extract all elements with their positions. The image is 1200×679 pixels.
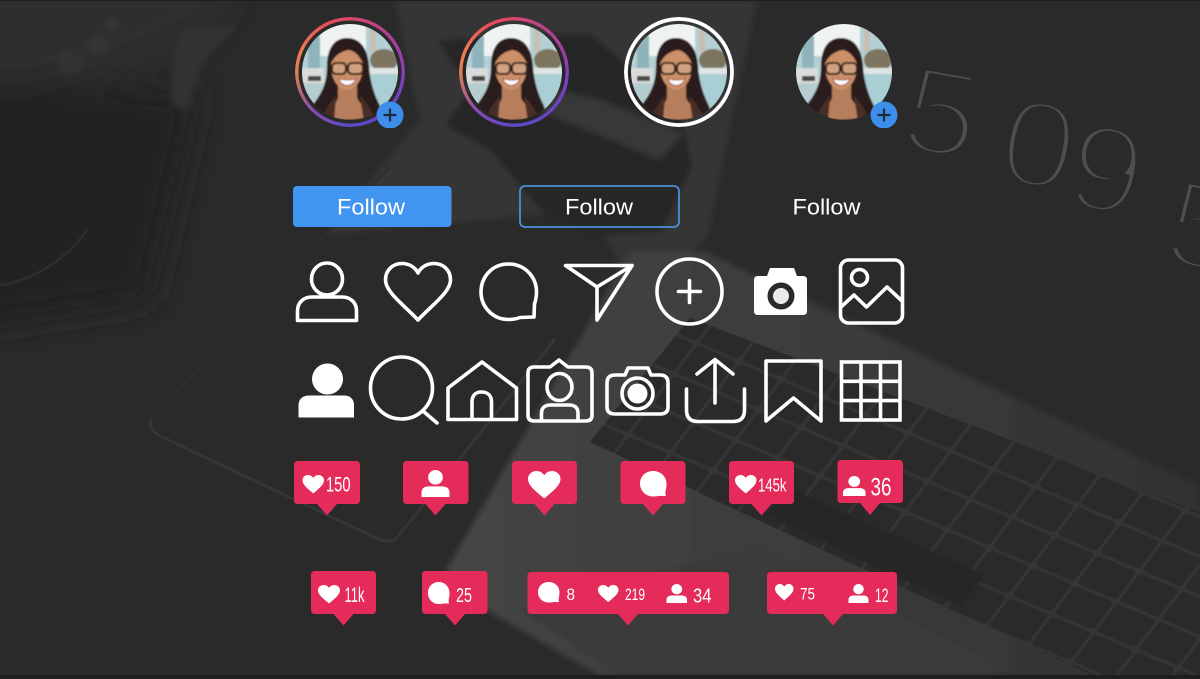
icon: house [448,362,516,420]
background clock digits [892,37,1200,301]
button: filled Follow [293,186,452,227]
icon: person outline [298,263,356,320]
badge: combined 8, 219, 34: 34 [693,586,712,608]
button: outlined Follow: Follow [565,194,634,220]
badge: likes 150 [294,461,360,516]
icon: bookmark [766,361,821,421]
badge: combined 8, 219, 34 [528,572,729,626]
badge: heart [512,461,577,516]
badge: likes 145k: 145k [758,476,787,496]
badge: comments 25 [422,571,488,626]
avatar 3: white ring [624,17,734,127]
badge: follower [403,461,468,516]
badge: likes 11k: 11k [344,584,365,607]
icon: grid [842,362,900,420]
badge: followers 36: 36 [870,474,892,502]
icon: heart outline [386,264,450,320]
icon: portrait frame [528,360,592,421]
icon: share upload [686,360,744,422]
button: text Follow: Follow [792,194,861,220]
avatar 4: no ring with plus badge [796,24,898,128]
icon: camera outline [607,368,668,414]
badge: combined 75, 12: 75 [800,584,815,604]
badge: combined 75, 12: 12 [875,586,888,607]
badge: comments 25: 25 [456,585,472,607]
button: filled Follow: Follow [337,194,406,220]
badge: likes 11k [311,571,376,626]
avatar 1: gradient ring with plus badge [295,17,405,128]
badge: followers 36 [838,460,903,515]
icon: comment bubble outline [481,264,536,320]
icon: magnifier [370,357,437,423]
avatar 2: gradient ring [459,17,569,127]
badge: comment [620,461,686,516]
badge: combined 75, 12 [767,572,897,626]
icon: person filled [298,364,354,418]
button: outlined Follow [520,186,679,227]
icon: plus in circle [657,259,722,324]
badge: combined 8, 219, 34: 8 [566,585,575,604]
background clock digits: 0 [989,69,1088,219]
icon: send paper plane [566,266,632,320]
badge: likes 150: 150 [326,474,350,496]
badge: likes 145k [729,461,794,516]
badge: combined 8, 219, 34: 219 [625,585,645,604]
background clock digits: 5 [892,37,991,187]
icon: picture frame [840,260,902,323]
icon: filled camera [754,268,807,315]
background clock digits: 9 [1057,94,1156,244]
